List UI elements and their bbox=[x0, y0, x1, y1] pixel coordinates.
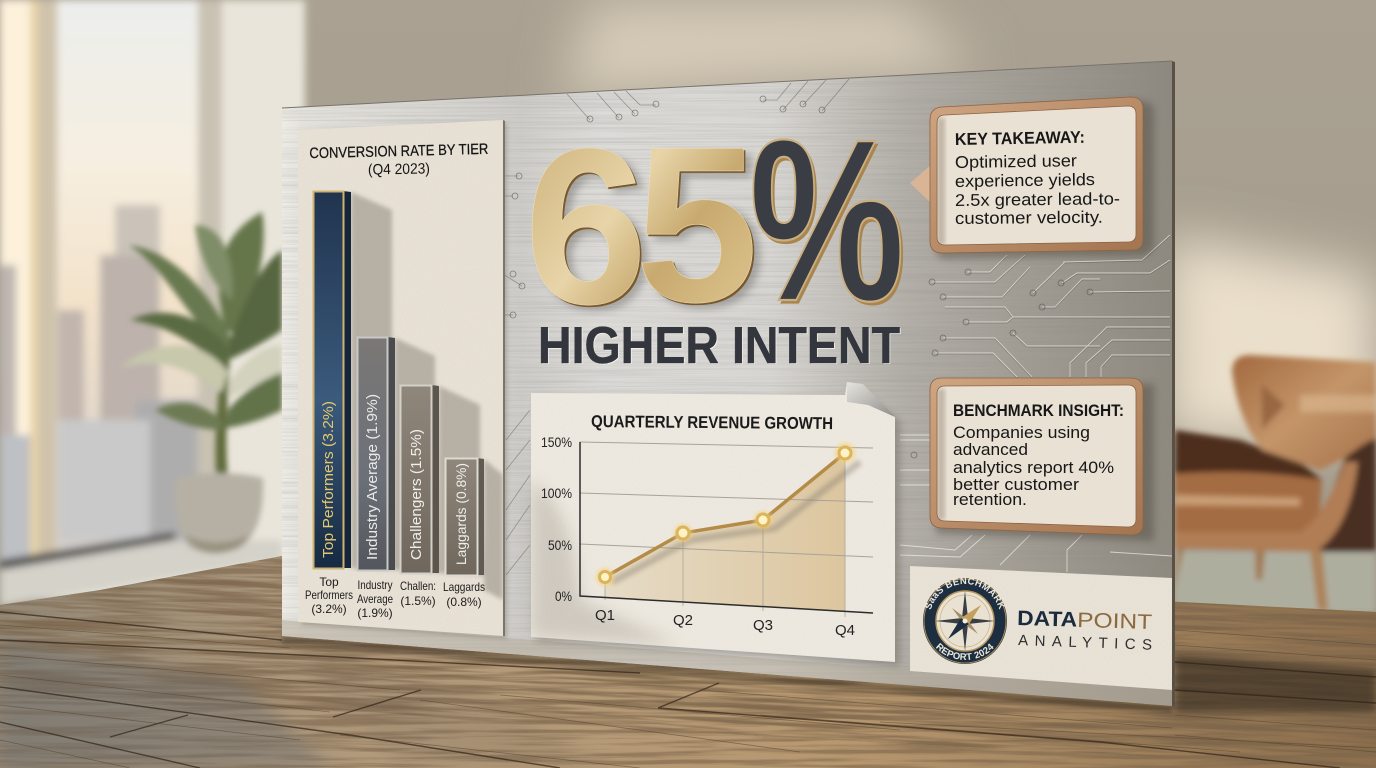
bar captions: Performers bbox=[305, 588, 353, 602]
plant and pot bbox=[120, 212, 282, 553]
wooden table bbox=[0, 556, 1376, 768]
line chart: Q2 bbox=[673, 612, 693, 629]
bar: industry average bbox=[358, 337, 395, 570]
callout text: 2.5x greater lead-to- bbox=[955, 189, 1120, 210]
line chart: 100% bbox=[541, 485, 572, 501]
page curl bbox=[847, 382, 895, 417]
line chart: Q4 bbox=[835, 622, 855, 639]
line chart: 150% bbox=[541, 434, 572, 450]
callout text: retention. bbox=[953, 490, 1027, 509]
heading: conversion rate by tier: (Q4 2023) bbox=[368, 160, 430, 179]
headline: 65%: % bbox=[751, 95, 907, 353]
callout: benchmark insight bbox=[930, 378, 1154, 541]
bar captions: Challen: bbox=[400, 579, 436, 593]
logo wordmark bbox=[1017, 607, 1153, 654]
line chart bbox=[541, 434, 873, 639]
callout text: Companies using bbox=[953, 423, 1090, 442]
callout pointer bbox=[910, 165, 931, 203]
heading: conversion rate by tier: CONVERSION RATE BY TIER bbox=[309, 141, 489, 162]
headline: 65% bbox=[524, 92, 907, 357]
bar captions: Industry bbox=[358, 578, 392, 592]
window and skyline bbox=[0, 0, 305, 606]
line chart: 0% bbox=[555, 588, 572, 604]
heading: quarterly revenue growth: QUARTERLY REVENUE GROWTH bbox=[591, 412, 833, 433]
bar: laggards: Laggards (0.8%) bbox=[453, 463, 469, 565]
wall light patches bbox=[560, 0, 1376, 440]
headline: 65%: 5 bbox=[637, 103, 760, 351]
callout text: Optimized user bbox=[955, 151, 1077, 172]
panel: conversion rate by tier bbox=[298, 120, 507, 639]
bar: top performers: Top Performers (3.2%) bbox=[320, 401, 337, 558]
callout text: BENCHMARK INSIGHT: bbox=[953, 401, 1124, 420]
callout text: better customer bbox=[953, 475, 1079, 494]
callout text bbox=[953, 401, 1124, 509]
logo wordmark: ANALYTICS bbox=[1018, 632, 1152, 654]
bar captions: (3.2%) bbox=[311, 602, 347, 616]
callout text bbox=[955, 128, 1120, 228]
bar: laggards bbox=[446, 458, 484, 576]
headline: 65%: 6 bbox=[532, 109, 655, 357]
headline: higher intent: HIGHER INTENT bbox=[539, 318, 901, 376]
circuit traces bbox=[283, 79, 1172, 575]
bar captions: (1.9%) bbox=[357, 606, 393, 620]
bar captions: Average bbox=[357, 592, 393, 606]
bar captions: Laggards bbox=[443, 580, 485, 594]
bar: top performers bbox=[314, 191, 351, 568]
icon: compass badge: SaaS BENCHMARK bbox=[925, 578, 1005, 610]
callout: key takeaway bbox=[910, 97, 1154, 259]
headline: 65%: 5 bbox=[635, 101, 758, 349]
callout text: advanced bbox=[953, 440, 1028, 459]
panel: quarterly revenue growth bbox=[531, 382, 900, 666]
bar: challengers bbox=[400, 385, 439, 574]
logo wordmark: DATA bbox=[1017, 607, 1077, 632]
bar shadows bbox=[351, 192, 503, 600]
headline: 65%: % bbox=[749, 92, 905, 350]
line chart: 50% bbox=[548, 537, 572, 553]
heading: conversion rate by tier bbox=[309, 141, 489, 179]
bar captions bbox=[305, 575, 485, 620]
line chart: Q3 bbox=[753, 617, 773, 634]
bar: industry average: Industry Average (1.9%) bbox=[364, 394, 381, 560]
logo wordmark: POINT bbox=[1077, 609, 1153, 634]
headline: higher intent: HIGHER INTENT bbox=[538, 317, 900, 375]
callout text: experience yields bbox=[955, 170, 1095, 191]
bar: challengers: Challengers (1.5%) bbox=[408, 429, 425, 560]
bar captions: (0.8%) bbox=[446, 595, 482, 609]
bar captions: Top bbox=[319, 575, 339, 589]
callout text: analytics report 40% bbox=[953, 458, 1114, 477]
icon: compass badge: REPORT 2024 bbox=[936, 642, 994, 660]
headline: 65%: 5 bbox=[643, 107, 766, 355]
bar captions: (1.5%) bbox=[400, 594, 436, 608]
panel: logo bbox=[910, 566, 1172, 690]
metal backing panel bbox=[282, 60, 1175, 710]
callout text: customer velocity. bbox=[955, 208, 1103, 228]
callout text: KEY TAKEAWAY: bbox=[955, 128, 1085, 149]
leather armchair bbox=[1175, 355, 1376, 612]
icon: compass badge bbox=[923, 578, 1007, 664]
headline: 65%: 6 bbox=[526, 105, 649, 353]
headline: 65%: 6 bbox=[524, 103, 647, 351]
line chart: Q1 bbox=[595, 607, 615, 624]
